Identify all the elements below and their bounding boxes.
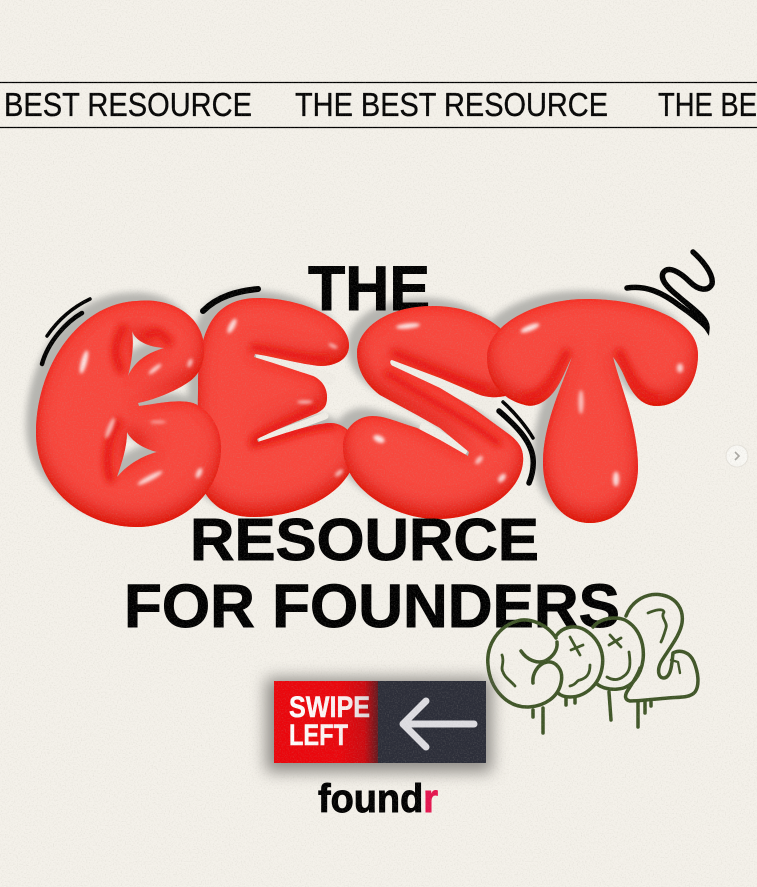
button red panel xyxy=(274,681,379,763)
button shadow xyxy=(266,678,492,772)
heading word: THE: THE xyxy=(308,254,430,324)
ticker band: BEST RESOURCE xyxy=(4,86,252,123)
swipe left button xyxy=(266,678,492,772)
button label xyxy=(289,691,370,752)
motion marks xyxy=(42,252,712,483)
graffiti doodle xyxy=(488,594,698,733)
foundr logo: foundr xyxy=(318,777,438,821)
balloon word: BEST xyxy=(36,298,698,527)
letter B xyxy=(36,301,221,527)
letter T xyxy=(487,299,698,523)
letter shadows xyxy=(26,290,688,519)
letter E xyxy=(197,298,356,517)
ticker band: THE BEST RESOURCE xyxy=(295,86,608,123)
light gaps seen through the letter slits xyxy=(262,357,490,450)
button label: SWIPE xyxy=(289,691,370,724)
button dark panel xyxy=(378,681,486,763)
letter S xyxy=(343,306,523,519)
carousel next indicator xyxy=(726,445,748,467)
icon: left arrow xyxy=(403,701,474,747)
heading lines: RESOURCE FOR FOUNDERS xyxy=(124,507,620,640)
heading lines: RESOURCE FOR FOUNDERS: FOR FOUNDERS xyxy=(124,572,620,640)
button label: LEFT xyxy=(289,719,348,752)
ticker band xyxy=(0,82,757,128)
heading lines: RESOURCE FOR FOUNDERS: RESOURCE xyxy=(190,507,539,573)
